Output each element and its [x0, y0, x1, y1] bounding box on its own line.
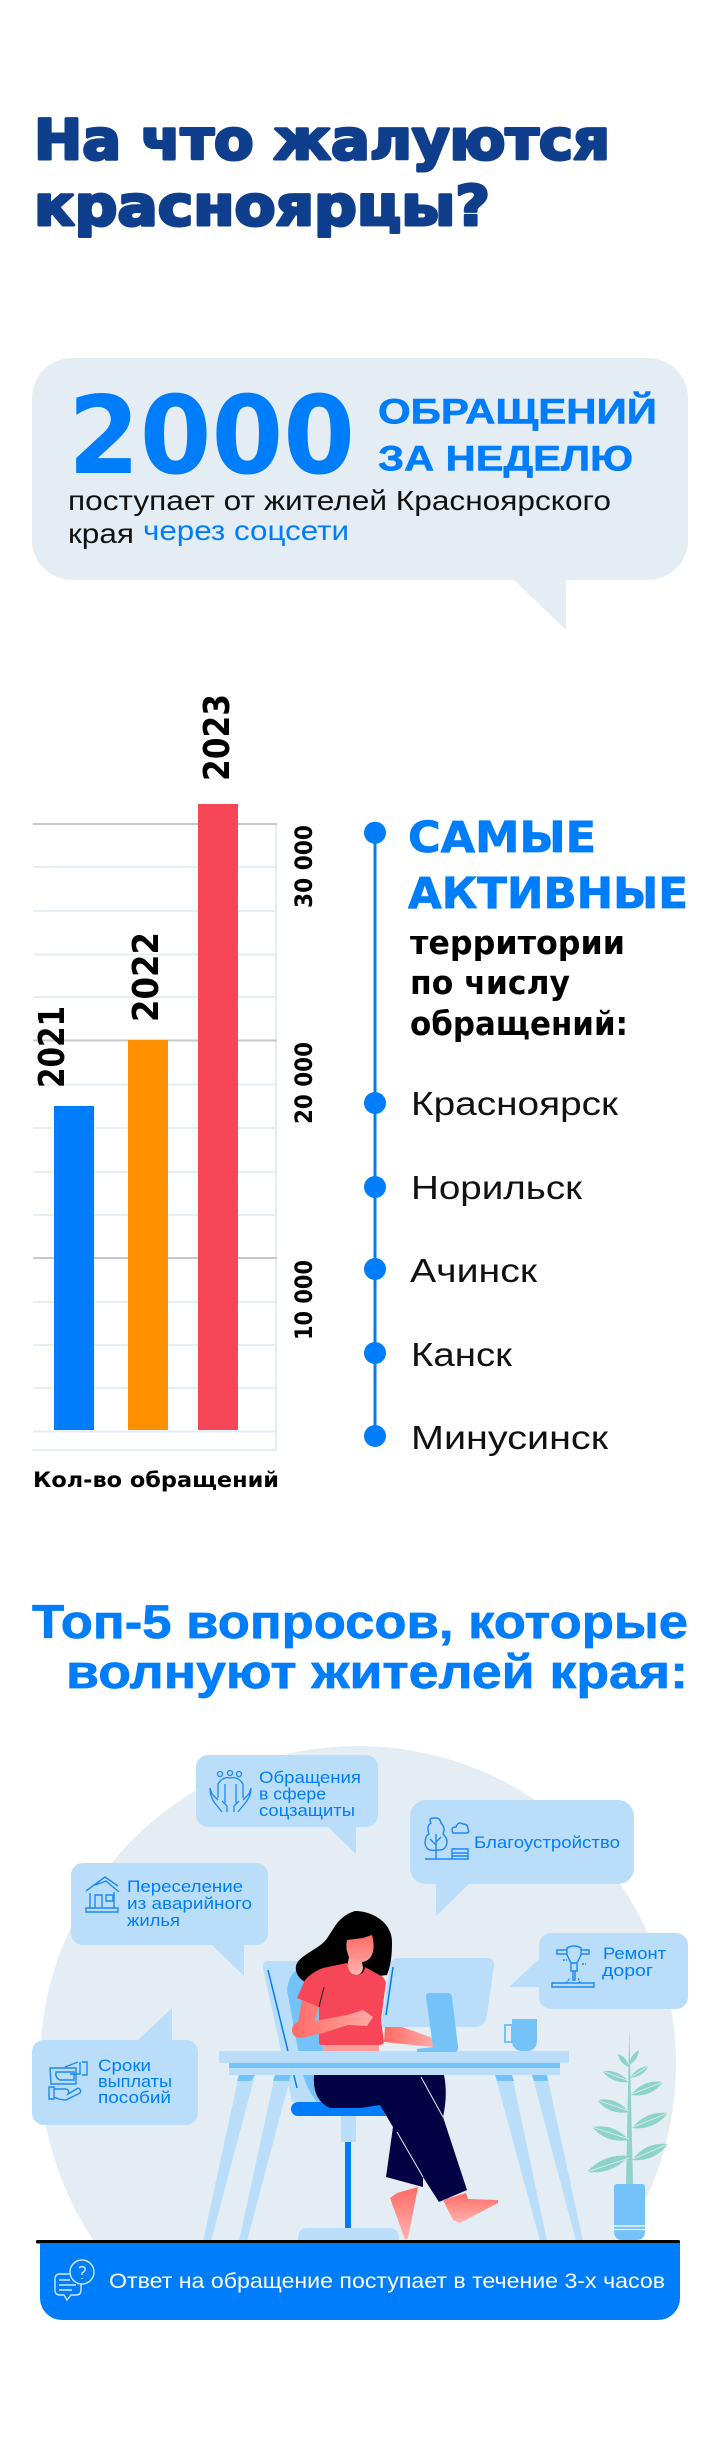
year labels: 2021: [32, 1006, 73, 1088]
desk legs: [203, 2075, 583, 2241]
city list: Норильск: [411, 1169, 583, 1206]
callout: social protection: [196, 1755, 378, 1854]
heading: top-5 questions: Топ-5 вопросов, которые: [32, 1595, 688, 1648]
big number: 2000: [68, 374, 355, 499]
plant: [587, 2028, 668, 2240]
text: Ремонт: [603, 1944, 666, 1963]
neck and face: [346, 1935, 374, 1975]
appeals per week label: ОБРАЩЕНИЙ: [378, 392, 657, 432]
text: [127, 1877, 252, 1930]
monitor: [381, 1958, 494, 2027]
appeals per week label: ЗА НЕДЕЛЮ: [378, 440, 633, 478]
description text: [68, 485, 611, 549]
desk: [219, 2051, 569, 2075]
subheading: территории: [410, 923, 625, 962]
subheading: [410, 923, 628, 1043]
axis labels: [290, 825, 318, 1340]
bar 2023: [198, 804, 238, 1430]
icon: question chat bubbles: [55, 2260, 94, 2300]
panel: response time banner: [40, 2243, 680, 2320]
city list: Красноярск: [411, 1085, 619, 1122]
heading: top-5 questions: волнуют жителей края:: [66, 1645, 688, 1698]
text: дорог: [602, 1961, 653, 1980]
callout: benefits payment: [32, 2008, 198, 2125]
city list: Минусинск: [411, 1419, 609, 1456]
axis labels: 10 000: [290, 1260, 318, 1340]
title: На что жалуются: [34, 108, 610, 172]
left arm: [292, 2000, 373, 2038]
city list: [410, 1085, 619, 1456]
callout: road repair: [509, 1933, 688, 2009]
illustration: woman at desk: [203, 1911, 668, 2241]
bar 2021: [54, 1106, 94, 1430]
pants: [314, 2075, 467, 2202]
year labels: [32, 694, 238, 1088]
heading: most active: АКТИВНЫЕ: [408, 869, 688, 919]
text: Переселение: [127, 1877, 243, 1896]
illustration: background circle: [41, 1746, 676, 2240]
hair: [296, 1911, 392, 1985]
laptop: [417, 1993, 458, 2052]
text: пособий: [98, 2088, 171, 2107]
text: [259, 1768, 361, 1820]
subheading: обращений:: [410, 1004, 628, 1043]
text: выплаты: [98, 2072, 172, 2091]
year labels: 2023: [197, 694, 238, 781]
title: красноярцы?: [34, 174, 490, 238]
text: из аварийного: [127, 1894, 252, 1913]
text: соцзащиты: [259, 1801, 355, 1820]
appeals per week label: [378, 392, 657, 478]
icon: jackhammer: [552, 1946, 594, 1987]
chair: [263, 1961, 399, 2241]
callout: resettlement: [71, 1863, 268, 1976]
text: Ответ на обращение поступает в течение 3-х часов: [109, 2270, 665, 2293]
icon: hands with people: [210, 1770, 251, 1812]
icon: house: [86, 1877, 119, 1912]
callout: landscaping: [410, 1800, 634, 1916]
year labels: 2022: [126, 932, 167, 1022]
city list: Ачинск: [410, 1252, 538, 1289]
icon: hand with money: [49, 2062, 87, 2100]
title: [34, 108, 610, 238]
axis caption: Кол-во обращений: [33, 1468, 279, 1492]
axis labels: 20 000: [290, 1042, 318, 1124]
text: [98, 2056, 172, 2107]
feet: [390, 2187, 418, 2240]
subheading: по числу: [410, 963, 570, 1002]
shirt: [297, 1963, 386, 2045]
text: в сфере: [259, 1784, 326, 1804]
text: жилья: [127, 1911, 180, 1930]
text: Благоустройство: [474, 1833, 620, 1852]
description text: края: [68, 518, 134, 549]
sleeve seam: [319, 1987, 324, 2007]
mug: [505, 2019, 537, 2051]
heading: top-5 questions: [32, 1595, 688, 1698]
waist: [323, 2045, 379, 2051]
bar 2022: [128, 1040, 168, 1430]
heading: most active: САМЫЕ: [408, 813, 596, 863]
description text: поступает от жителей Красноярского: [68, 485, 611, 516]
panel: most active territories timeline: [364, 813, 688, 1456]
text: Сроки: [98, 2056, 151, 2075]
panel: 2000 appeals speech bubble: [32, 358, 688, 630]
description text: через соцсети: [143, 515, 349, 546]
city list: Канск: [411, 1336, 513, 1373]
text: [602, 1944, 666, 1980]
ground line: [36, 2240, 680, 2244]
bar chart: appeals by year: [32, 694, 318, 1492]
text: Обращения: [259, 1768, 361, 1787]
heading: most active: [408, 813, 688, 919]
right forearm: [384, 2027, 433, 2047]
icon: tree and bench: [425, 1818, 469, 1859]
axis labels: 30 000: [290, 825, 318, 908]
